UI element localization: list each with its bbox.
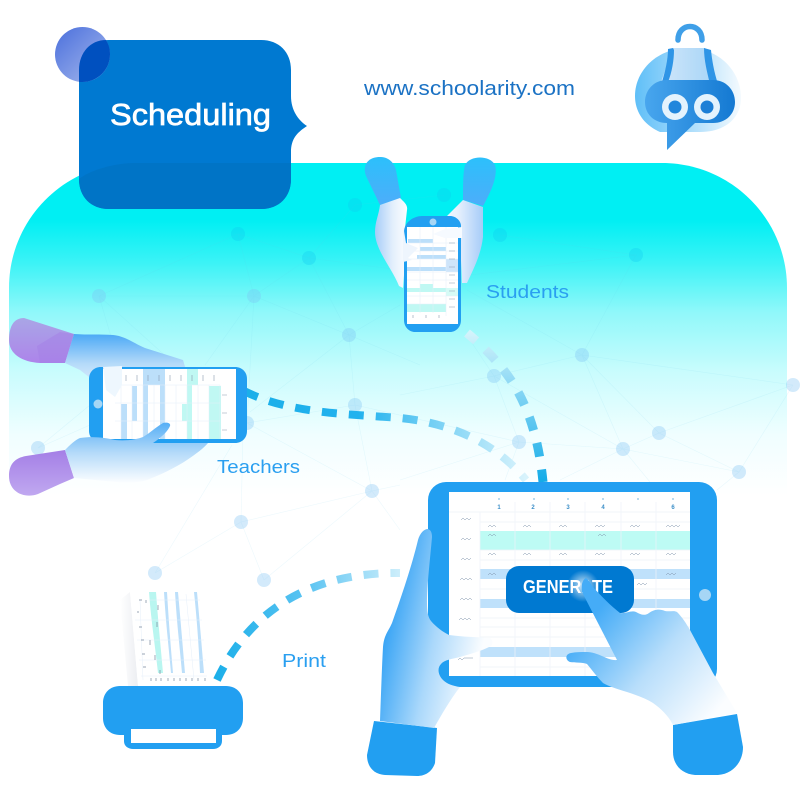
phone screen [103,369,236,439]
sleeve fold [37,332,74,363]
top hand fingers over phone [103,366,122,397]
bag handle [678,26,702,40]
students group [365,157,569,332]
left hand [380,529,492,728]
phone body [404,216,461,332]
students label: Students [486,282,569,302]
right hand cuff [673,714,743,775]
left hand cuff [367,721,437,776]
touch glow [567,570,599,602]
lower tint of bubble [79,163,291,209]
robot head [645,80,735,150]
phone body [89,367,247,443]
teacher phone [89,367,247,443]
bag body [661,48,717,82]
schedule table [449,499,690,676]
left sleeve [365,157,401,205]
column numbers: 2 [531,505,535,511]
squiggle placeholders [458,518,680,660]
logo backdrop [635,48,741,132]
decorative circle [55,27,110,82]
robot eyes [662,94,720,120]
column numbers: 3 [566,505,570,511]
right hand [566,578,737,725]
tablet group [367,482,743,776]
phone camera [430,218,436,226]
column numbers [497,505,675,511]
right finger over phone [433,227,462,238]
teachers group [9,318,300,496]
website url: www.schoolarity.com [363,78,575,100]
network diagram [31,188,800,587]
printed paper [130,592,208,686]
student phone [404,216,461,332]
print label: Print [282,651,326,671]
schedule columns [115,369,227,439]
left fingers over phone [403,225,418,262]
dashed connector: teachers to tablet [244,391,526,480]
right hand [433,200,483,283]
tablet screen [449,492,690,676]
schedule bars [407,227,458,318]
printer slot [131,729,216,743]
dashed connector: students to tablet [467,333,543,482]
column numbers: 1 [497,505,501,511]
tablet body [428,482,717,687]
generate button [506,566,634,613]
phone screen [407,227,458,324]
right sleeve [463,158,496,206]
column numbers: 6 [671,505,675,511]
teachers label: Teachers [217,457,300,477]
tablet side button [699,589,711,601]
bottom hand [65,423,208,483]
paper shadow [120,592,138,686]
logo [635,26,741,150]
phone side button [94,400,102,408]
column numbers: 4 [601,505,605,511]
circle overlap [79,40,110,82]
left hand [375,198,407,288]
dashed connector: printer to tablet [217,573,400,680]
title callout [55,27,307,209]
generate button: GENERATE [523,577,613,597]
printer group [103,592,326,749]
top hand [65,334,186,400]
callout bubble [79,40,307,209]
background rounded panel [9,163,787,500]
bottom sleeve [9,450,74,496]
top sleeve [9,318,74,363]
heading: Scheduling [110,97,271,132]
bag straps [662,48,718,84]
printer body [103,686,243,749]
